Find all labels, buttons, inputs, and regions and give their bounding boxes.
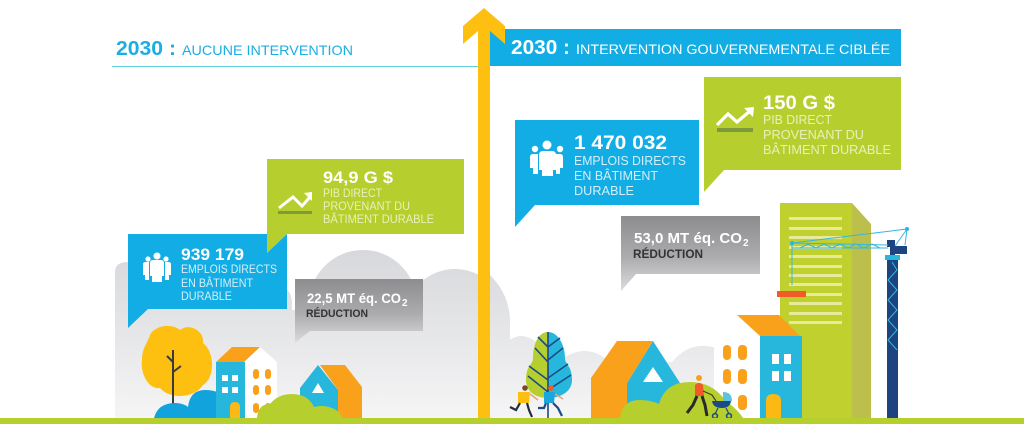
callout: left CO2 reduction xyxy=(295,279,423,343)
callout: right jobs: EN BÂTIMENT xyxy=(574,168,658,183)
callout: right jobs: 1 470 032 xyxy=(574,133,667,154)
title: aucune intervention: AUCUNE INTERVENTION xyxy=(182,42,353,58)
left scene: yellow tree xyxy=(142,326,212,405)
left scene: green bushes xyxy=(257,394,342,418)
callout: right GDP: 150 G $ xyxy=(763,93,835,114)
banner: intervention gouvernementale ciblée xyxy=(490,29,901,66)
banner: intervention gouvernementale ciblée: 2030 : xyxy=(511,37,570,59)
callout: left GDP xyxy=(267,159,464,253)
left scene: small house xyxy=(300,365,362,418)
callout: right CO2 reduction: 2 xyxy=(743,238,749,249)
left scene: blue bushes xyxy=(154,390,217,418)
callout: right jobs: EMPLOIS DIRECTS xyxy=(574,153,686,168)
central arrow xyxy=(463,8,505,418)
icon: people xyxy=(530,140,563,176)
callout: left jobs xyxy=(128,234,287,328)
right scene: crane xyxy=(777,227,909,418)
callout: left jobs: 939 179 xyxy=(181,245,244,264)
callout: left CO2 reduction: 2 xyxy=(402,298,408,309)
right scene: tall green tower xyxy=(780,203,871,418)
callout: right jobs xyxy=(515,120,699,227)
callout: right jobs: DURABLE xyxy=(574,183,634,198)
callout: right GDP: PIB DIRECT xyxy=(763,112,832,127)
callout: right CO2 reduction: 53,0 MT éq. CO xyxy=(634,230,742,247)
callout: left CO2 reduction: 22,5 MT éq. CO xyxy=(307,290,401,306)
right scene: apartment building xyxy=(714,315,802,418)
banner: intervention gouvernementale ciblée: INTERVENTION GOUVERNEMENTALE CIBLÉE xyxy=(576,41,890,57)
icon: people xyxy=(143,252,171,282)
callout: left GDP: PIB DIRECT xyxy=(323,186,383,200)
background clouds: left xyxy=(115,250,506,418)
right scene: runners xyxy=(510,385,563,417)
title: aucune intervention xyxy=(116,38,353,60)
callout: right GDP xyxy=(704,77,901,192)
callout: left GDP: BÂTIMENT DURABLE xyxy=(323,211,434,226)
callout: left GDP: PROVENANT DU xyxy=(323,199,410,213)
title: aucune intervention: 2030 : xyxy=(116,38,176,60)
callout: left jobs: DURABLE xyxy=(181,289,232,303)
callout: left CO2 reduction: RÉDUCTION xyxy=(306,307,368,320)
callout: right GDP: PROVENANT DU xyxy=(763,127,864,142)
callout: left GDP: 94,9 G $ xyxy=(323,168,394,187)
right scene: woman with stroller xyxy=(687,375,732,418)
callout: right CO2 reduction: RÉDUCTION xyxy=(633,246,703,261)
callout: left jobs: EN BÂTIMENT xyxy=(181,275,254,290)
callout: right CO2 reduction xyxy=(621,216,760,291)
right scene: leaf tree xyxy=(526,332,572,418)
callout: right GDP: BÂTIMENT DURABLE xyxy=(763,142,891,157)
right scene: green hill xyxy=(620,382,743,418)
left scene: apartment building xyxy=(216,347,277,418)
ground xyxy=(0,418,1024,424)
icon: growth chart xyxy=(717,107,754,132)
icon: growth chart xyxy=(278,192,312,214)
right scene: A-frame house xyxy=(591,341,680,418)
title rule xyxy=(112,66,478,67)
background clouds: right xyxy=(490,275,716,418)
callout: left jobs: EMPLOIS DIRECTS xyxy=(181,262,277,276)
